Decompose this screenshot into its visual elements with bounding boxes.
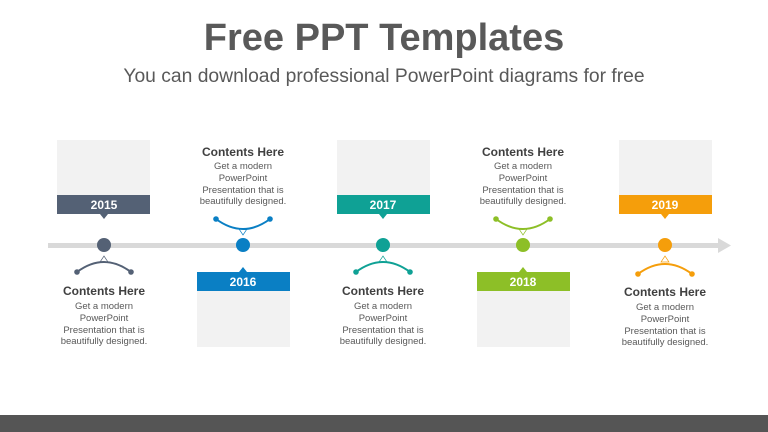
item 2016: Contents Here xyxy=(202,145,284,159)
footer bar xyxy=(0,415,768,432)
title: Free PPT Templates xyxy=(204,17,564,59)
item 2016: beautifully designed. xyxy=(200,196,286,207)
item 2019: 2019 xyxy=(652,198,679,212)
item 2016: PowerPoint xyxy=(219,173,268,184)
item 2019: beautifully designed. xyxy=(622,337,708,348)
item 2016: Presentation that is xyxy=(202,185,284,196)
item 2017: beautifully designed. xyxy=(340,336,426,347)
item 2019: PowerPoint xyxy=(641,314,690,325)
item 2015: Presentation that is xyxy=(63,325,145,336)
item 2015: Get a modern xyxy=(75,301,133,312)
item 2015 xyxy=(57,140,150,347)
subtitle: You can download professional PowerPoint diagrams for free xyxy=(123,66,645,87)
item 2018: PowerPoint xyxy=(499,173,548,184)
timeline arrow xyxy=(48,238,731,253)
item 2018: 2018 xyxy=(510,275,537,289)
item 2015: 2015 xyxy=(91,198,118,212)
item 2016: Get a modern xyxy=(214,161,272,172)
item 2017: Contents Here xyxy=(342,284,424,298)
item 2017: 2017 xyxy=(370,198,397,212)
item 2018: Presentation that is xyxy=(482,185,564,196)
item 2018 xyxy=(477,145,570,347)
item 2015: beautifully designed. xyxy=(61,336,147,347)
item 2017 xyxy=(337,140,430,347)
item 2018: Get a modern xyxy=(494,161,552,172)
item 2017: Presentation that is xyxy=(342,325,424,336)
item 2019 xyxy=(619,140,712,348)
item 2018: Contents Here xyxy=(482,145,564,159)
item 2015: Contents Here xyxy=(63,284,145,298)
item 2017: Get a modern xyxy=(354,301,412,312)
item 2019: Presentation that is xyxy=(624,326,706,337)
item 2017: PowerPoint xyxy=(359,313,408,324)
item 2016 xyxy=(197,145,290,347)
item 2016: 2016 xyxy=(230,275,257,289)
item 2018: beautifully designed. xyxy=(480,196,566,207)
item 2019: Get a modern xyxy=(636,302,694,313)
item 2019: Contents Here xyxy=(624,285,706,299)
item 2015: PowerPoint xyxy=(80,313,129,324)
